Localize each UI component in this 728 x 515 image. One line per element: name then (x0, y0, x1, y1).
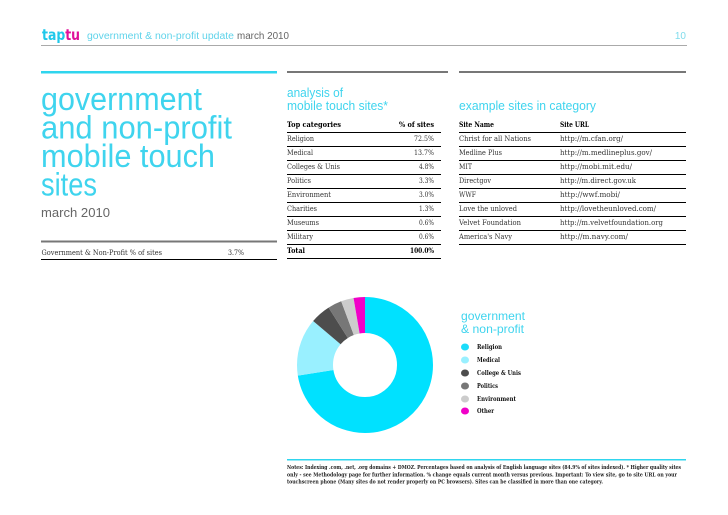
table rows: http://mobi.mit.edu/ (560, 162, 633, 171)
table rows: http://m.navy.com/ (560, 232, 629, 241)
header (41, 26, 687, 46)
heading (287, 86, 388, 113)
logo: taptu: taptu (42, 26, 80, 44)
table rows: Charities (287, 204, 317, 213)
table rows: Total (287, 246, 305, 255)
table rows: 0.6% (419, 232, 434, 241)
legend heading (461, 309, 526, 336)
main title: government (41, 81, 202, 117)
panel: left title: 3.7% (228, 248, 244, 257)
table rows (287, 120, 441, 259)
main title: sites (41, 166, 97, 202)
table rows: Top categories (287, 120, 341, 129)
table rows: WWF (459, 190, 476, 199)
summary row: Government & Non-Profit % of sites (42, 248, 162, 257)
legend heading: & non-profit (461, 322, 525, 336)
table rows: Directgov (459, 176, 492, 185)
table rows: http://m.velvetfoundation.org (560, 218, 663, 227)
table rows: 13.7% (414, 148, 434, 157)
legend heading: government (461, 309, 526, 323)
panel: analysis table (287, 71, 686, 259)
table rows: Environment (287, 190, 331, 199)
table rows: America's Navy (458, 232, 513, 241)
table rows: Colleges & Unis (287, 162, 340, 171)
table rows: Velvet Foundation (458, 218, 521, 227)
table rows: Love the unloved (459, 204, 517, 213)
panel: example sites table (458, 99, 686, 245)
footnotes: touchscreen phone (Many sites do not render properly on PC browsers). Sites can be classified in more than one category. (287, 478, 603, 486)
header title: government & non-profit update (87, 31, 234, 42)
heading: analysis of (287, 86, 343, 100)
footnotes (287, 459, 686, 486)
legend item: Medical: Medical (477, 356, 500, 364)
table rows: 100.0% (410, 246, 434, 255)
page number: 10 (675, 31, 686, 42)
main title: mobile touch (41, 138, 215, 174)
table rows: 3.0% (419, 190, 434, 199)
legend item: Politics: Politics (477, 382, 498, 390)
legend (461, 309, 526, 415)
panel: left title (41, 71, 277, 260)
table rows: Medical (287, 148, 314, 157)
table rows: Site URL (560, 120, 589, 129)
heading: mobile touch sites* (287, 99, 388, 113)
table rows (458, 120, 686, 245)
table rows: MIT (459, 162, 472, 171)
table rows: Medline Plus (459, 148, 502, 157)
table rows: Military (287, 232, 314, 241)
legend item: Environment: Environment (477, 395, 516, 403)
table rows: Christ for all Nations (459, 134, 531, 143)
heading: example sites in category (459, 99, 597, 113)
table rows: 0.6% (419, 218, 434, 227)
main title (41, 81, 232, 202)
donut chart (315, 315, 415, 415)
legend item: Religion: Religion (477, 343, 502, 351)
table rows: Site Name (459, 120, 494, 129)
header date: march 2010 (237, 31, 289, 42)
table rows: % of sites (399, 120, 434, 129)
table rows: Religion (287, 134, 314, 143)
table rows: http://wwf.mobi/ (560, 190, 621, 199)
legend item: Other: Other (477, 407, 495, 415)
table rows: Politics (287, 176, 311, 185)
table rows: 72.5% (414, 134, 434, 143)
table rows: http://lovetheunloved.com/ (560, 204, 657, 213)
subtitle: march 2010 (41, 205, 110, 220)
table rows: Museums (287, 218, 319, 227)
table rows: 1.3% (419, 204, 434, 213)
table rows: 3.3% (419, 176, 434, 185)
table rows: 4.8% (419, 162, 434, 171)
legend item: College & Unis: College & Unis (477, 369, 521, 377)
table rows: http://m.direct.gov.uk (560, 176, 637, 185)
table rows: http://m.medlineplus.gov/ (560, 148, 653, 157)
table rows: http://m.cfan.org/ (560, 134, 624, 143)
main title: and non-profit (41, 110, 232, 146)
